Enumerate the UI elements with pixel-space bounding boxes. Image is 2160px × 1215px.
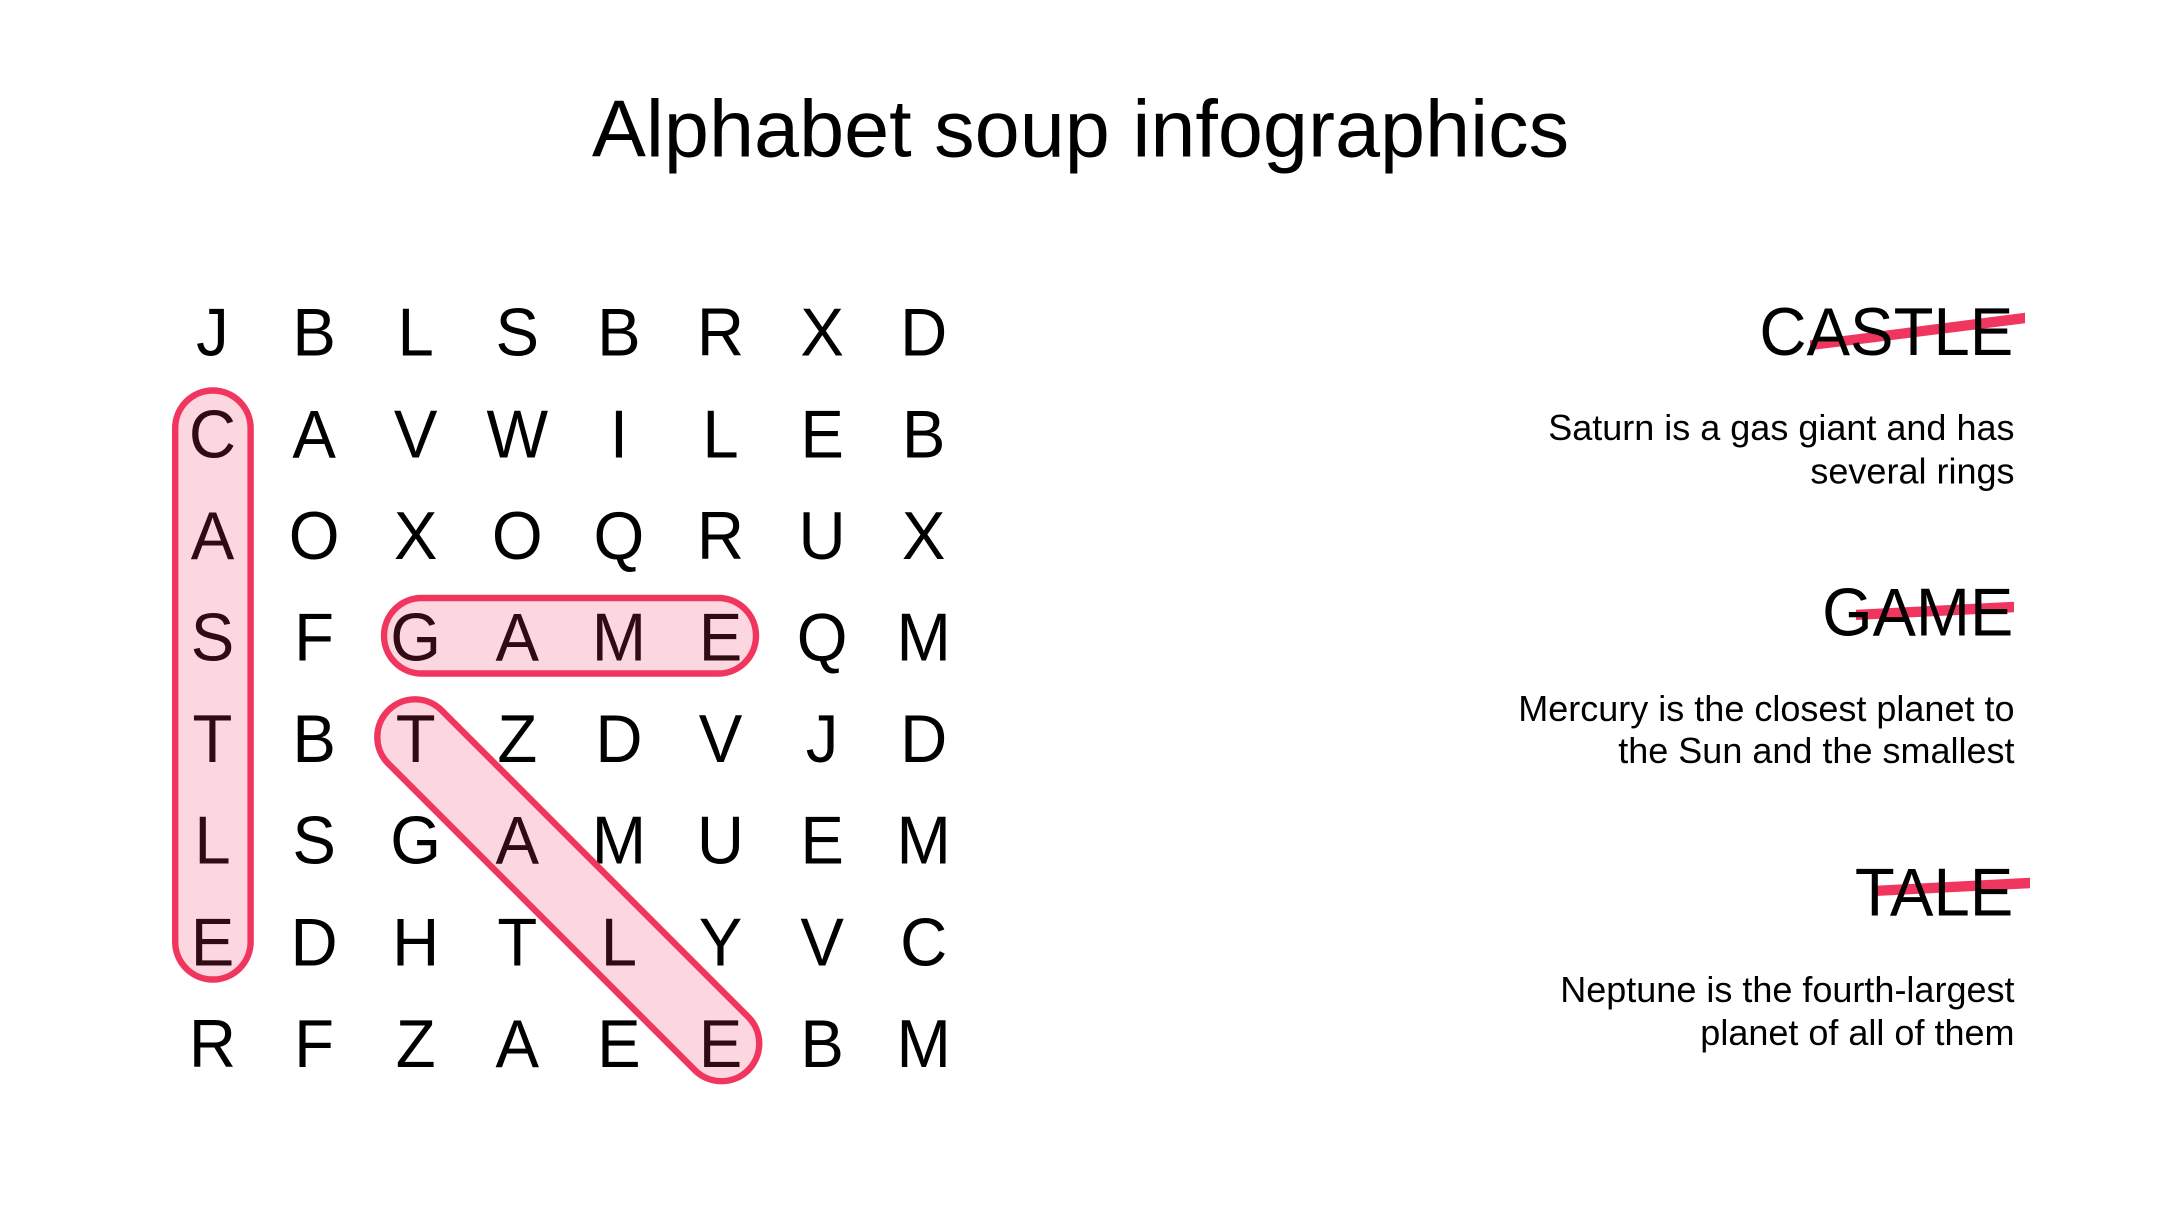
grid row 1: S <box>496 296 539 371</box>
description: GAME <box>1518 688 2014 771</box>
grid row 3 <box>191 499 945 574</box>
grid row 2 <box>189 397 945 473</box>
grid row 7: Y <box>699 905 742 981</box>
grid row 7: D <box>291 905 338 981</box>
grid row 4: M <box>897 600 951 676</box>
grid row 5: Z <box>497 702 537 777</box>
grid row 7: T <box>497 905 537 981</box>
word entry: TALE <box>1560 855 2030 1053</box>
grid row 4 <box>191 600 951 676</box>
strike line: CASTLE <box>1810 313 2025 350</box>
grid row 4: G <box>390 600 441 676</box>
word entry: CASTLE <box>1548 295 2025 492</box>
grid row 7: V <box>800 905 844 981</box>
grid row 7: E <box>191 905 234 981</box>
grid row 1: L <box>398 296 434 371</box>
panel: word search grid <box>175 296 951 1097</box>
grid row 3: A <box>191 499 235 574</box>
grid row 5: T <box>396 702 436 777</box>
grid row 8: F <box>294 1007 334 1082</box>
grid row 2: W <box>486 397 548 473</box>
grid row 3: O <box>492 499 543 574</box>
description: CASTLE: Saturn is a gas giant and has <box>1548 407 2014 448</box>
grid row 7 <box>191 905 947 981</box>
grid row 6: A <box>496 804 540 879</box>
grid row 8: E <box>699 1007 742 1082</box>
grid row 4: F <box>294 600 334 676</box>
grid row 2: B <box>902 397 945 473</box>
word: TALE: TALE <box>1855 855 2013 931</box>
grid row 4: S <box>191 600 234 676</box>
panel: word list <box>1518 295 2030 1053</box>
description: CASTLE: several rings <box>1810 451 2014 492</box>
grid row 5: D <box>900 702 947 777</box>
highlight pill: CASTLE <box>175 390 251 980</box>
grid row 8: E <box>597 1007 641 1082</box>
grid row 7: H <box>392 905 439 981</box>
grid row 6: S <box>292 804 336 879</box>
grid row 6: U <box>697 804 744 879</box>
grid row 8: Z <box>396 1007 436 1082</box>
description: CASTLE <box>1548 407 2014 492</box>
grid row 4: E <box>699 600 742 676</box>
grid row 1: J <box>196 296 229 371</box>
grid row 8: M <box>897 1007 951 1082</box>
grid row 1 <box>196 296 947 371</box>
grid row 3: Q <box>594 499 644 574</box>
grid row 5 <box>193 702 947 777</box>
grid row 1: X <box>800 296 844 371</box>
highlight pill: GAME <box>384 598 756 674</box>
grid row 4: A <box>496 600 540 676</box>
strike line: GAME <box>1856 602 2014 620</box>
grid row 4: Q <box>797 600 847 676</box>
word entry: GAME <box>1518 575 2014 771</box>
grid row 3: R <box>697 499 744 574</box>
grid row 6: G <box>390 804 441 879</box>
grid row 8 <box>189 1007 951 1082</box>
grid row 5: J <box>806 702 838 777</box>
description: TALE: planet of all of them <box>1700 1012 2014 1053</box>
letter grid <box>189 296 951 1082</box>
grid row 6: E <box>800 804 844 879</box>
grid row 2: E <box>800 397 844 473</box>
grid row 5: B <box>292 702 336 777</box>
description: TALE <box>1560 969 2014 1053</box>
grid row 6: M <box>897 804 951 879</box>
grid row 3: X <box>902 499 945 574</box>
strike line: TALE <box>1876 878 2030 896</box>
grid row 5: V <box>699 702 743 777</box>
grid row 6 <box>194 804 951 879</box>
grid row 2: A <box>292 397 336 473</box>
description: GAME: the Sun and the smallest <box>1618 730 2014 771</box>
grid row 1: B <box>292 296 336 371</box>
description: TALE: Neptune is the fourth-largest <box>1560 969 2014 1010</box>
grid row 8: A <box>496 1007 540 1082</box>
grid row 7: C <box>900 905 947 981</box>
grid row 6: L <box>194 804 231 879</box>
grid row 7: L <box>601 905 637 981</box>
grid row 2: L <box>702 397 739 473</box>
title: Alphabet soup infographics <box>592 85 1569 175</box>
grid row 1: D <box>900 296 947 371</box>
grid row 1: B <box>597 296 641 371</box>
grid row 6: M <box>592 804 646 879</box>
highlight pill: TALE <box>362 684 775 1097</box>
word: GAME: GAME <box>1822 575 2013 651</box>
grid row 2: V <box>394 397 438 473</box>
grid row 1: R <box>697 296 744 371</box>
grid row 4: M <box>592 600 646 676</box>
grid row 5: D <box>595 702 642 777</box>
grid row 8: B <box>800 1007 844 1082</box>
word: CASTLE: CASTLE <box>1759 295 2013 370</box>
description: GAME: Mercury is the closest planet to <box>1518 688 2014 729</box>
grid row 2: I <box>610 397 628 473</box>
grid row 8: R <box>189 1007 236 1082</box>
grid row 2: C <box>189 397 236 473</box>
grid row 5: T <box>193 702 232 777</box>
grid row 3: O <box>289 499 339 574</box>
grid row 3: U <box>799 499 846 574</box>
grid row 3: X <box>394 499 437 574</box>
